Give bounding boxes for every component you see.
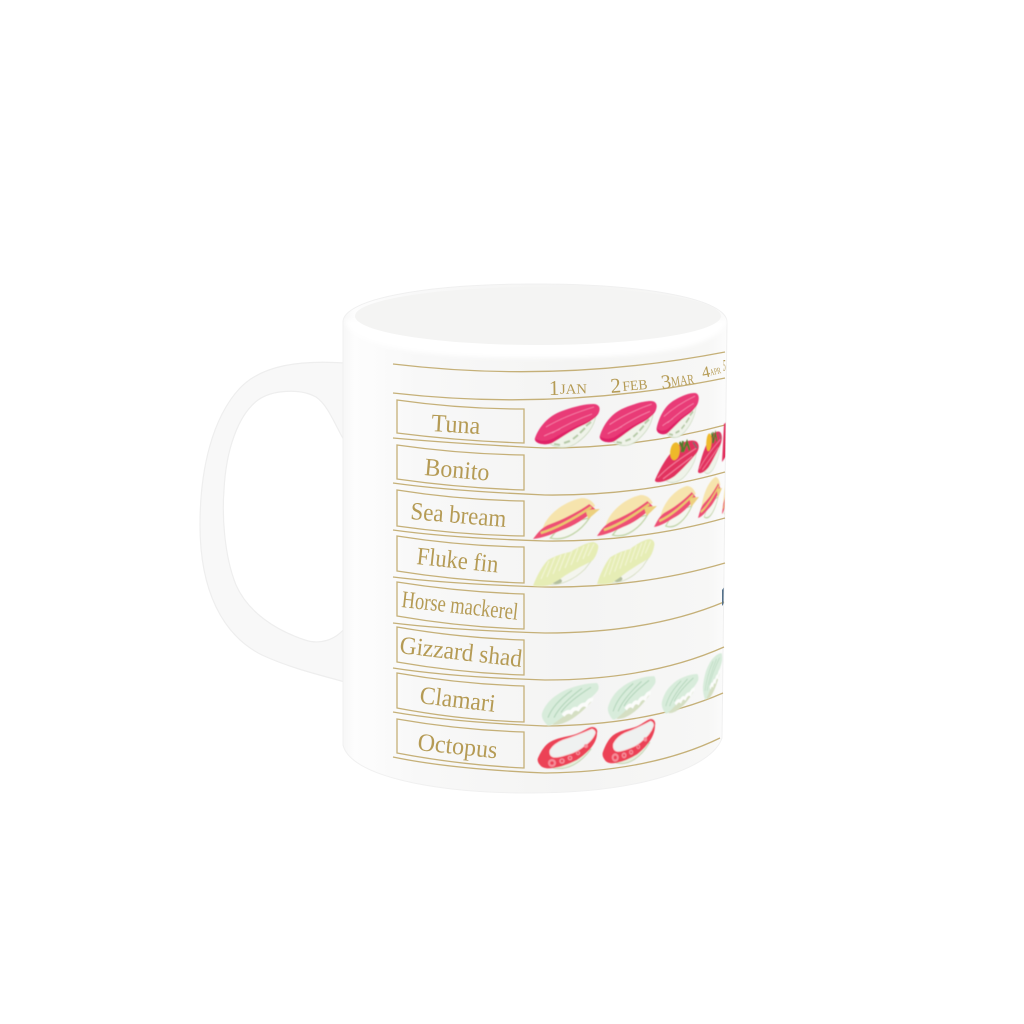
month: May, cut off by mug edge: 5 [723,356,726,375]
month: February [609,371,648,398]
month: January: 1 [549,376,560,400]
row label: Horse mackerel: Horse mackerel [400,587,520,626]
octopus sushi row [538,719,655,769]
row label: Gizzard shad: Gizzard shad [398,632,524,673]
sushi grid [533,393,730,769]
row label: Sea bream: Sea bream [409,498,508,533]
month: February: FEB [622,378,648,395]
month: March: MAR [670,372,696,391]
month: January [549,375,587,400]
horse mackerel fragment at mug edge [722,588,724,606]
month headers [549,356,726,400]
month: April [700,361,722,382]
row label: Octopus: Octopus [416,729,499,764]
month: April: 4 [700,364,712,382]
row label: Clamari: Clamari [418,682,497,718]
mug rim band [345,320,727,358]
bonito sushi row [655,422,727,483]
mug infographic scene [200,284,728,794]
fluke fin sushi row [533,539,654,586]
clamari sushi row [542,653,722,726]
sea bream sushi row [533,477,730,539]
month: March [660,368,696,394]
mug body [343,284,727,793]
table lines [393,352,725,773]
row label: Bonito: Bonito [423,454,491,487]
row label: Tuna: Tuna [431,410,481,440]
mug handle [200,362,345,682]
tuna sushi row [535,393,699,448]
month: January: JAN [560,382,587,398]
mug opening [355,287,721,345]
month: April: APR [709,365,722,377]
month: March: 3 [660,371,673,394]
month: February: 2 [609,373,622,398]
row label: Fluke fin: Fluke fin [415,543,500,579]
label boxes [397,400,524,768]
